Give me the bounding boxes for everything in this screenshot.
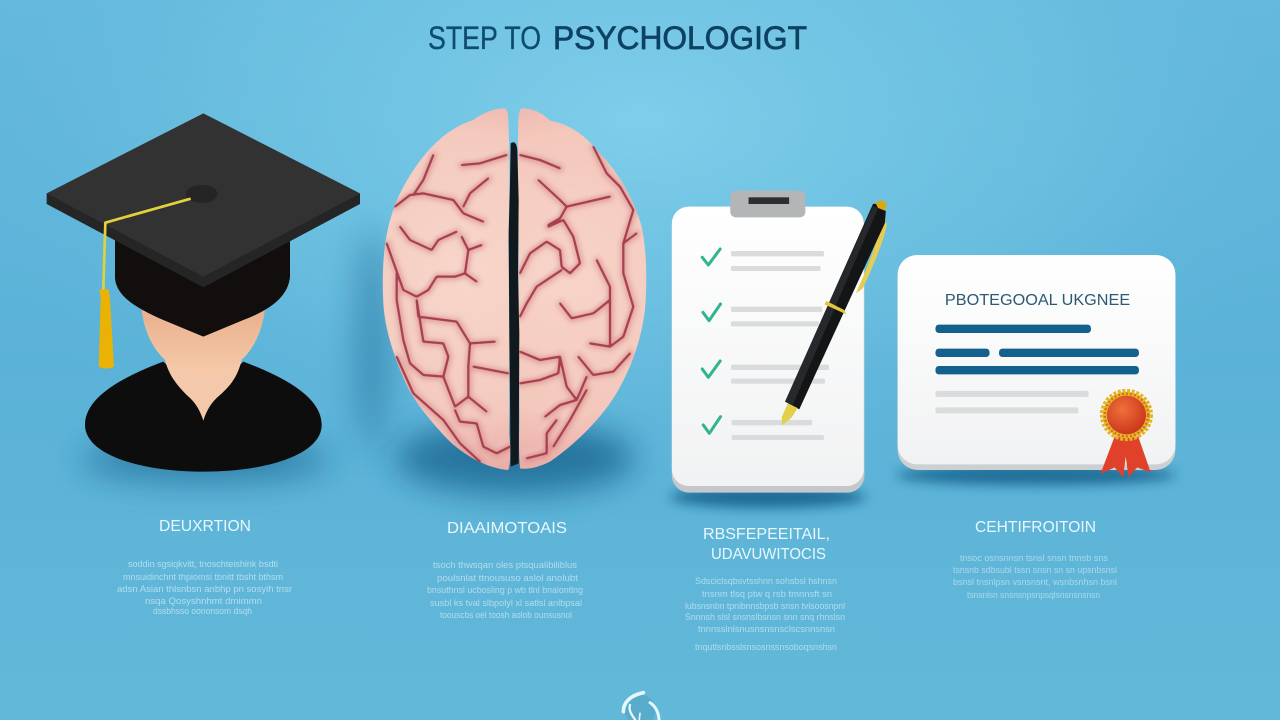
certificate rim bbox=[898, 260, 1175, 470]
seal rosette bbox=[1103, 392, 1150, 438]
button bbox=[186, 185, 218, 203]
description bbox=[685, 576, 845, 653]
description: lubsnsnbn tpnibnnsbpsb snsn tvlsoosnpnl bbox=[685, 601, 845, 612]
description: dssbhsso oononsom dsqh bbox=[153, 606, 252, 617]
tassel bbox=[99, 289, 114, 369]
description: tnnnsslnlsnusnsnsnsclscsnnsnsn bbox=[698, 624, 835, 635]
title bbox=[428, 20, 807, 56]
step 4: certification bbox=[953, 519, 1117, 601]
seal ribbon bbox=[1100, 437, 1151, 477]
icon: professional licence certificate bbox=[898, 255, 1175, 477]
drop shadows bbox=[80, 230, 1176, 508]
clipboard rim bbox=[672, 210, 864, 493]
certificate sheet bbox=[898, 255, 1175, 464]
central fissure bbox=[509, 142, 519, 467]
folds: soft shading bbox=[384, 143, 637, 462]
cap base bbox=[115, 240, 290, 337]
description: tnqutlsnbsslsnsosnssnsoboqsnshsn bbox=[695, 642, 837, 653]
description: bsnsl tnsnlpsn vsnsnsnt, wsnbsnhsn bsnl bbox=[953, 577, 1117, 588]
check marks bbox=[702, 249, 721, 433]
folds: creases bbox=[387, 147, 637, 462]
heading: CEHTIFROITOIN bbox=[975, 519, 1096, 536]
description: tsoch thwsqan oles ptsqualibiliblus bbox=[433, 560, 577, 571]
description: mnsuidinchnt thpiomsi tbnitt tbsht bthsm bbox=[123, 572, 283, 583]
step 3: professional evaluations: UDAVUWITOCIS bbox=[711, 546, 826, 563]
left hemisphere bbox=[383, 108, 510, 470]
mortarboard edge bbox=[47, 193, 360, 287]
icon: clipboard checklist with pen bbox=[672, 191, 887, 493]
description: tnsoc osnsnnsn tsnsl snsn tnnsb sns bbox=[960, 553, 1108, 564]
blue text lines bbox=[935, 325, 1139, 374]
description bbox=[953, 553, 1117, 601]
heading: DIAAIMOTOAIS bbox=[447, 520, 567, 537]
description: poulsnlat ttnoususo aslol anolubt bbox=[437, 573, 578, 584]
title: STEP TO bbox=[428, 20, 541, 56]
description: tnsnm tlsq ptw q rsb tmnnsft sn bbox=[702, 589, 832, 600]
description: soddin sgsiqkvitt, tnoschteishink bsdti bbox=[128, 559, 278, 570]
description: Snnnsh slsl snsnslbsnsn snn snq rhnslsn bbox=[685, 612, 845, 623]
heading: DEUXRTION bbox=[159, 518, 251, 535]
step 3: professional evaluations bbox=[685, 526, 845, 653]
pen bbox=[782, 200, 887, 425]
neck bbox=[165, 360, 242, 421]
description: tsnsnlsn snsnsnpsnpsqlsnsnsnsnsn bbox=[967, 590, 1100, 601]
description bbox=[427, 560, 583, 621]
checklist lines bbox=[731, 251, 829, 440]
right hemisphere bbox=[518, 108, 646, 469]
description bbox=[117, 559, 292, 617]
certificate heading: PBOTEGOOAL UKGNEE bbox=[945, 292, 1130, 309]
description: nsqa Qosyshnhmt dmimmn bbox=[145, 596, 262, 607]
description: adsn Asian thlsnbsn anbhp pn sosyih tnsr bbox=[117, 584, 292, 595]
face bbox=[142, 308, 265, 374]
clipboard sheet bbox=[672, 207, 864, 486]
step 2: diagnostics bbox=[427, 520, 583, 621]
step 1: education bbox=[117, 518, 292, 617]
icon: graduate with cap bbox=[47, 113, 360, 472]
icon: brain bbox=[383, 108, 646, 470]
mortarboard top bbox=[47, 113, 360, 277]
clip bbox=[730, 191, 805, 217]
grey text lines bbox=[935, 391, 1089, 413]
description: susbl ks tval slbpolyl xl satlsl anlbpsal bbox=[430, 598, 582, 609]
cord bbox=[103, 199, 191, 290]
icon: bottom logo bbox=[623, 693, 659, 720]
description: Sdsciclsqbsvtsshnn sohsbsl hshnsn bbox=[695, 576, 837, 587]
description: toouscbs oel toosh aolob ounsusnol bbox=[440, 610, 572, 621]
gown bbox=[85, 362, 322, 472]
heading: RBSFEPEEITAIL, bbox=[703, 526, 830, 543]
title: PSYCHOLOGIGT bbox=[553, 20, 807, 56]
description: tsnsnb sdbsubl tssn snsn sn sn upsnbsnsl bbox=[953, 565, 1117, 576]
description: bnsuthnsl ucbosling p wb tlnl bnalontlng bbox=[427, 585, 583, 596]
